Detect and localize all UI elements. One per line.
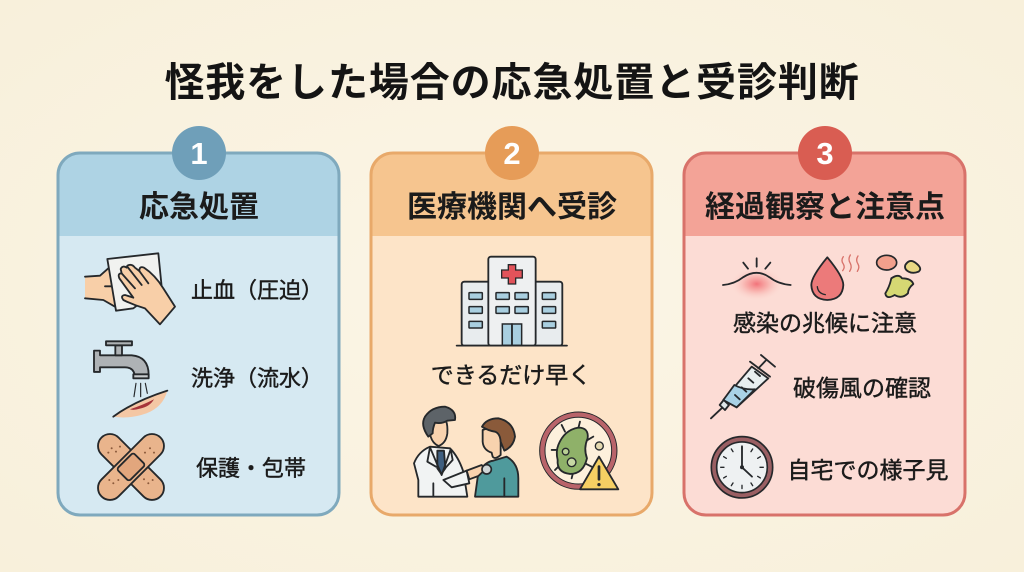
label: 止血（圧迫）: 止血（圧迫） <box>191 278 323 303</box>
panel border <box>58 153 339 515</box>
icon: bacteria with warning <box>542 415 618 489</box>
panel header band <box>684 153 965 236</box>
number badge 3 <box>798 126 852 180</box>
label: 感染の兆候に注意: 感染の兆候に注意 <box>733 310 917 336</box>
icon: clock <box>711 437 773 498</box>
panel: 医療機関へ受診 <box>371 126 652 515</box>
icon: swollen skin <box>723 258 791 301</box>
label: できるだけ早く: できるだけ早く <box>431 362 591 388</box>
number badge 1: 1 <box>190 136 208 171</box>
panel: 応急処置 <box>58 126 339 515</box>
panel body <box>684 153 965 515</box>
icon: doctor examining patient <box>414 407 518 497</box>
panel border <box>684 153 965 515</box>
panel: 経過観察と注意点 <box>684 126 965 515</box>
icon: crossed bandages <box>93 429 169 505</box>
label: 洗浄（流水）: 洗浄（流水） <box>191 366 323 391</box>
panel header band <box>371 153 652 236</box>
icon: syringe <box>711 355 775 418</box>
number badge 3: 3 <box>816 136 834 171</box>
label: 保護・包帯: 保護・包帯 <box>196 456 306 481</box>
panel border <box>371 153 652 515</box>
label: 破傷風の確認: 破傷風の確認 <box>793 375 931 401</box>
icon: hand pressing cloth <box>85 253 175 324</box>
icon: faucet and wound <box>94 341 167 417</box>
icon: hospital building <box>457 257 567 346</box>
icon: fever blood drop <box>811 255 859 300</box>
icon: pus <box>877 255 920 297</box>
panel body <box>371 153 652 515</box>
label: 自宅での様子見: 自宅での様子見 <box>788 457 948 483</box>
number badge 1 <box>172 126 226 180</box>
number badge 2: 2 <box>503 136 521 171</box>
heading: 経過観察と注意点: 経過観察と注意点 <box>705 191 945 224</box>
heading: 応急処置: 応急処置 <box>139 191 259 224</box>
panel header band <box>58 153 339 236</box>
heading: 医療機関へ受診: 医療機関へ受診 <box>407 191 617 224</box>
panel body <box>58 153 339 515</box>
title: 怪我をした場合の応急処置と受診判断 <box>164 61 860 105</box>
number badge 2 <box>485 126 539 180</box>
